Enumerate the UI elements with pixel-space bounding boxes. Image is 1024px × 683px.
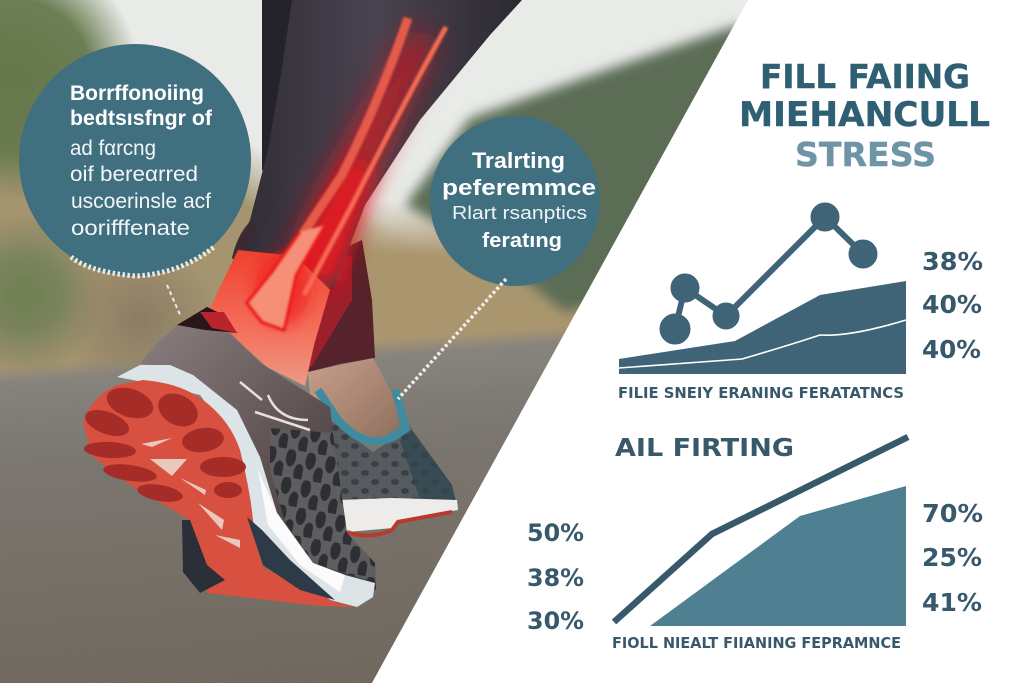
icon: ankle skin [208,250,330,386]
left values: 30% [527,607,584,635]
callout body text: ad fαrcng [70,137,156,160]
icon: back leg and rear shoe [262,0,458,536]
line with nodes [660,203,877,344]
chart caption: FILIE SNEIY ERANING FERATATNCS [618,384,904,402]
chart caption: FIOLL NIEALT FIIANING FEPRAMNCE [612,634,901,652]
road [0,320,600,683]
upper [140,325,376,590]
icon: glowing bones [247,18,446,330]
callout: right circle [430,116,600,286]
lower lugs [182,520,225,593]
chart values: 38% [922,247,983,276]
right values [922,499,983,617]
collar [177,307,237,333]
outsole [83,380,357,607]
arrow: left dotted arc and pointer [71,247,214,317]
rear shoe upper [332,421,456,500]
midsole [117,365,375,607]
callout footer text: feratıng [482,230,562,252]
chart: upper performance chart [618,203,983,402]
right values: 70% [922,499,983,528]
chart: lower performance chart [527,437,983,652]
calf [308,358,398,442]
left values [527,519,584,635]
callout body text [70,137,211,240]
right values: 25% [922,543,982,572]
chart values: 40% [922,290,982,319]
area chart [619,281,906,374]
title: MIEHANCULL [739,95,990,135]
chart values [922,247,983,364]
left values: 50% [527,519,584,547]
blurred hillside [0,0,630,400]
callout body text: Rlart rsanptics [452,203,587,223]
panel: white diagonal panel [372,0,1024,683]
outsole pods [82,382,246,505]
callout bold text: peferemmce [442,175,596,200]
heading: lower chart: AIL FIRTING [615,433,794,462]
title [739,57,990,174]
road grain [0,385,580,683]
left values: 38% [527,564,584,592]
callout bold text: bedtsısfngr of [70,107,213,130]
right values: 41% [922,588,982,617]
callout bold text: Tralrting [472,148,565,173]
callout body text: oorifffenate [71,217,190,240]
callout: left circle [19,44,251,276]
arrow: right dotted pointer [398,279,506,399]
trend line [614,437,908,622]
title: STRESS [795,135,936,174]
icon: front shoe [82,307,376,607]
callout bold text: Borrffonoiing [70,82,204,105]
icon: inflamed leg glow [275,30,435,290]
callout bold text [442,148,596,200]
callout body text: oif bereαrred [70,163,198,186]
title: FILL FAIING [760,57,970,96]
area chart [650,486,906,626]
blurred hill right [405,26,748,312]
icon: front leg legging [232,0,522,290]
callout bold text [70,82,213,130]
panel: running photo background [0,0,748,683]
rear shoe sole [338,498,458,532]
callout body text: uscoerinsle acf [71,190,211,213]
chart values: 40% [922,335,981,364]
